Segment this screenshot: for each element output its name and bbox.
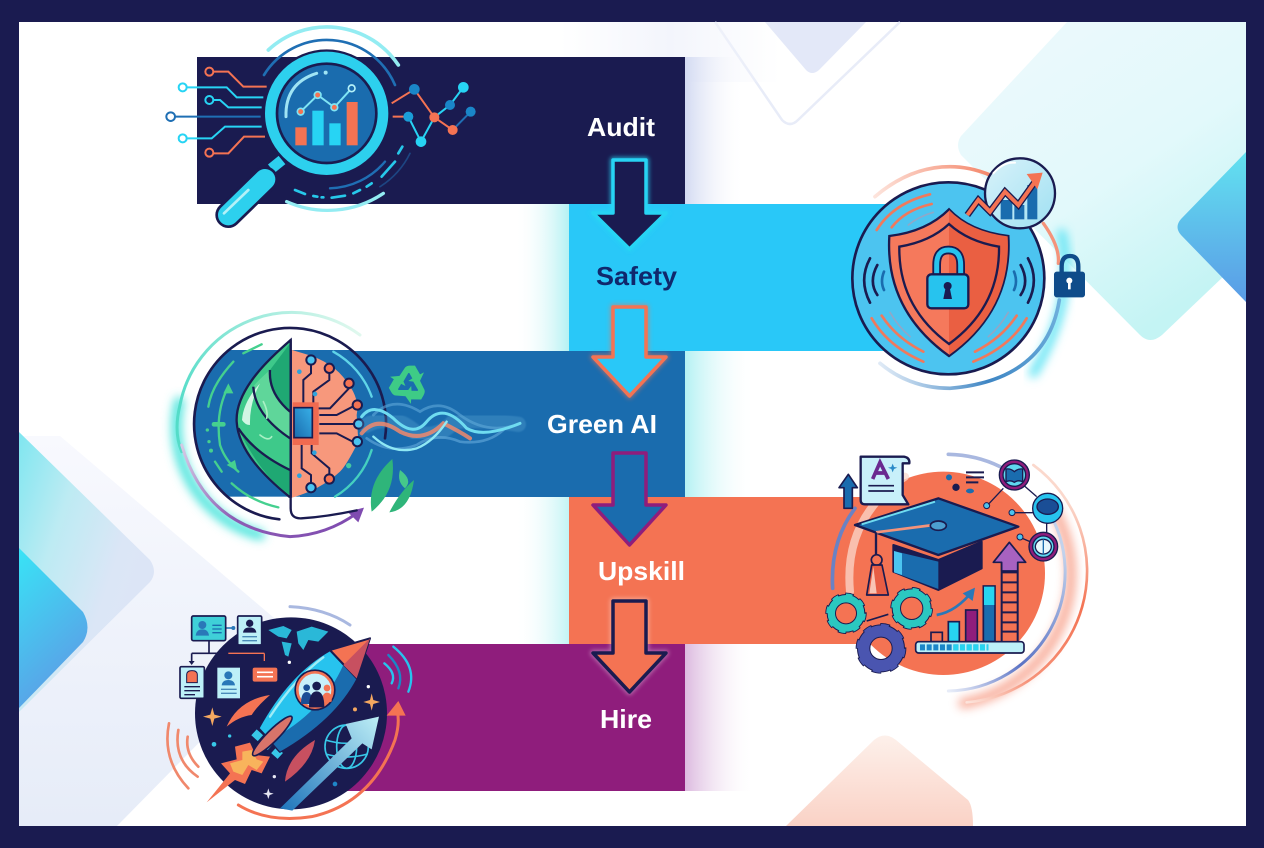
glow: left of Upskill xyxy=(515,497,569,644)
small leaves xyxy=(371,459,414,512)
diploma xyxy=(861,457,909,504)
icon: rocket launch and hiring xyxy=(167,607,411,818)
label: Hire: Hire xyxy=(600,704,652,734)
bar: Green AI xyxy=(300,351,685,497)
bar: Safety xyxy=(569,204,889,351)
globe xyxy=(325,725,368,768)
background: top soft panel xyxy=(560,22,780,82)
background: lower left bright diamond xyxy=(19,548,88,708)
main disc xyxy=(852,182,1044,374)
label: Audit: Audit xyxy=(587,112,655,142)
candidate card one xyxy=(192,616,226,641)
rocket fins xyxy=(227,695,315,782)
leaf half xyxy=(237,340,291,497)
blue disc band xyxy=(195,350,350,497)
outer arcs xyxy=(875,167,1066,388)
arrow: Green AI to Upskill xyxy=(593,453,666,545)
navy disc xyxy=(195,617,387,809)
tail ring colours xyxy=(254,732,280,756)
icon: magnifying glass with data chart xyxy=(166,27,476,215)
stem xyxy=(291,340,357,518)
rocket window with team xyxy=(294,669,336,711)
outer arcs xyxy=(167,607,411,818)
background: lower left mid diamond xyxy=(19,432,154,712)
icon: security shield with lock xyxy=(852,158,1085,388)
label: Upskill: Upskill xyxy=(598,556,685,586)
growth bubble xyxy=(967,158,1055,228)
background: right edge blue diamond xyxy=(1178,152,1246,302)
glow: right of Hire xyxy=(685,644,755,791)
arrow: Audit to Safety xyxy=(593,160,666,249)
stars and dots xyxy=(203,661,380,799)
orange disc xyxy=(842,472,1045,675)
small accents xyxy=(206,383,237,471)
halo arcs xyxy=(264,27,410,210)
bar chart xyxy=(931,586,995,642)
bar: Hire xyxy=(340,644,685,791)
world map xyxy=(268,626,328,657)
bar: Audit xyxy=(197,57,685,204)
glow: right of Audit xyxy=(685,57,745,204)
icon: leaf and circuit brain xyxy=(176,312,520,537)
circuit brain half xyxy=(292,350,363,498)
bar: Upskill xyxy=(569,497,889,644)
background: top chevron outline xyxy=(715,22,900,124)
gears xyxy=(828,588,975,671)
arrow: Safety to Green AI xyxy=(593,307,666,396)
navy ring xyxy=(194,328,386,519)
background: lower left large pale diamond xyxy=(19,436,300,826)
progress bar xyxy=(916,642,1024,653)
ladder arrow xyxy=(993,542,1026,642)
rocket tail ring xyxy=(253,732,281,757)
background: top triangle xyxy=(765,22,866,73)
label: Green AI: Green AI xyxy=(547,409,657,439)
pale inner arc xyxy=(849,477,905,592)
rocket body xyxy=(258,638,370,752)
right line chart xyxy=(366,82,476,147)
badge xyxy=(253,668,277,682)
arrow: Upskill to Hire xyxy=(593,601,666,692)
network nodes xyxy=(999,460,1063,561)
purple arrow head xyxy=(347,508,364,522)
candidate card three xyxy=(180,667,204,698)
shield xyxy=(889,209,1009,356)
outer arcs xyxy=(832,454,1087,703)
candidate card four xyxy=(217,668,240,698)
handle xyxy=(224,159,283,215)
sound waves xyxy=(864,194,1034,362)
halo rings xyxy=(176,312,360,537)
icon: recycle xyxy=(384,366,429,407)
exhaust nozzle xyxy=(249,713,296,759)
org chart xyxy=(180,616,277,698)
up arrow xyxy=(839,474,857,508)
orange arrow head xyxy=(387,701,406,716)
glow: left of Safety xyxy=(515,204,569,351)
glow: right of Green AI xyxy=(685,351,755,497)
scattered dots and lines xyxy=(946,472,1047,542)
growth arrow xyxy=(280,717,379,811)
background: top right pale diamond xyxy=(958,22,1246,340)
flame xyxy=(207,743,270,802)
glow panels beside the bars xyxy=(515,57,755,791)
lens xyxy=(263,49,391,177)
inner accents xyxy=(208,344,372,507)
label: Safety: Safety xyxy=(596,261,678,291)
background: bottom peach diamond xyxy=(786,736,973,826)
candidate card two xyxy=(238,616,262,645)
icon: graduation cap with skills xyxy=(828,454,1087,703)
left circuit lines xyxy=(166,68,267,157)
graduation cap xyxy=(855,498,1018,595)
padlock xyxy=(927,250,968,308)
energy wave xyxy=(362,404,520,450)
small padlock xyxy=(1054,256,1085,297)
